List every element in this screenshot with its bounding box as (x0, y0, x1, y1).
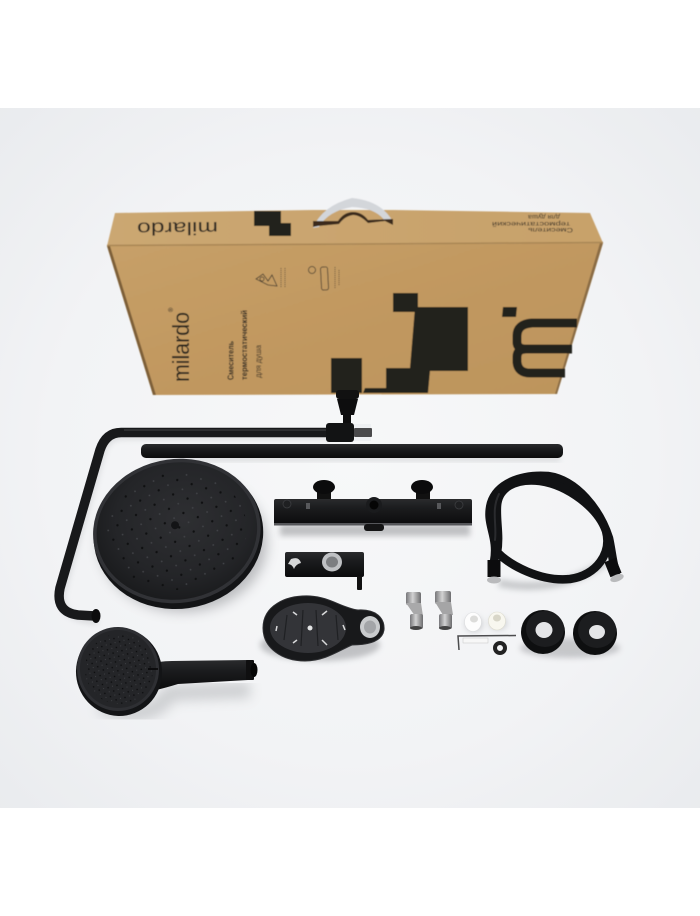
connector left (406, 592, 423, 630)
front product text: термостатический (240, 310, 249, 380)
arm coupling (326, 423, 354, 442)
front rotated m logo (517, 323, 577, 373)
shadow of rain shower (99, 474, 267, 612)
flap logo: milardo (137, 218, 218, 239)
slider bracket (285, 552, 364, 590)
flap product text: термостатический (491, 220, 570, 228)
handle (156, 660, 248, 690)
hose tip left (487, 576, 501, 584)
front product text (226, 310, 263, 380)
hand shower (69, 621, 257, 723)
spray head (69, 621, 169, 723)
hose end left (488, 560, 500, 577)
hose tip right (609, 572, 625, 584)
connector right (435, 591, 453, 630)
shower hose (489, 476, 616, 579)
rain shower head (84, 448, 273, 620)
allen key and pin (458, 636, 516, 650)
photo backdrop (0, 108, 700, 808)
thermostatic mixer (274, 480, 472, 531)
steel Y connectors (406, 591, 453, 630)
front product text: для душа (254, 344, 263, 378)
silver thread (354, 428, 372, 437)
outlet (366, 497, 382, 513)
box top flap (107, 210, 603, 246)
hose end right (610, 560, 616, 575)
shower arm (59, 423, 372, 623)
flap product text: для душа (528, 213, 560, 220)
threaded end (246, 660, 254, 680)
riser rod (141, 444, 563, 458)
body (274, 499, 472, 525)
white ring (322, 552, 342, 572)
wall bracket connector (336, 390, 359, 424)
markers (306, 503, 310, 509)
shadow of riser (150, 456, 560, 461)
registered mark: ® (168, 307, 175, 312)
box front panel (107, 243, 603, 395)
small washer (495, 643, 505, 653)
nozzle dots (99, 463, 254, 599)
mounting ring (360, 616, 380, 638)
flap pixel mark (254, 211, 291, 236)
flap product text (491, 213, 573, 233)
shadow of soap dish (260, 629, 380, 661)
dish plate (270, 603, 346, 653)
shadow of arm (62, 437, 340, 622)
flap product text: Смеситель (527, 226, 573, 233)
front product text: Смеситель (226, 341, 236, 380)
cardboard box (107, 198, 603, 395)
wall flange right (573, 611, 617, 655)
drain slots (276, 611, 345, 645)
white sealing rings (464, 612, 507, 632)
inlet left (317, 486, 331, 500)
front pixel graphic (331, 293, 517, 393)
shadow of hose (499, 560, 608, 586)
shadow of thermostat (280, 524, 470, 536)
white clip (288, 558, 301, 569)
front logo: milardo (168, 312, 194, 382)
inlet right (416, 486, 430, 500)
soap dish (263, 596, 384, 661)
care icons (256, 266, 339, 290)
carrying handle (313, 198, 393, 228)
arm end nut (92, 609, 100, 623)
wall flange left (521, 610, 565, 654)
shadow of hand shower (100, 690, 250, 713)
shadow of flanges (520, 638, 620, 658)
